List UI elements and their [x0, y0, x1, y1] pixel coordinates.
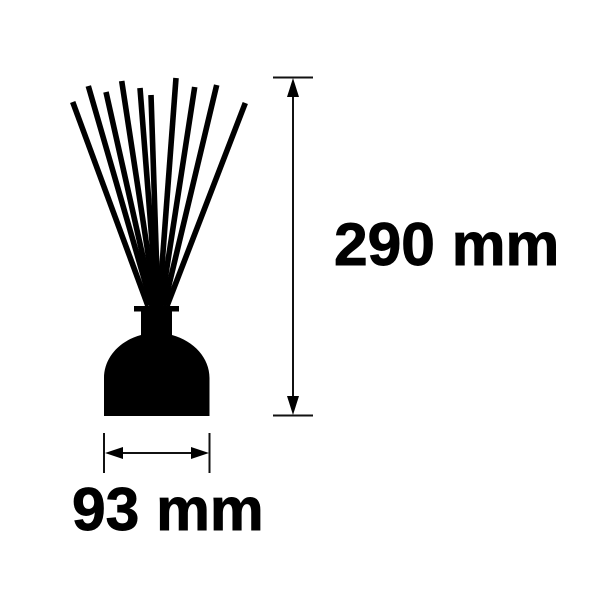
icon: reed sticks [73, 78, 245, 306]
height label: 290 mm [334, 210, 559, 278]
arrow: height dimension [273, 78, 313, 416]
icon: bottle silhouette [104, 306, 210, 416]
width label: 93 mm [72, 475, 264, 543]
arrow: width dimension [104, 433, 210, 473]
